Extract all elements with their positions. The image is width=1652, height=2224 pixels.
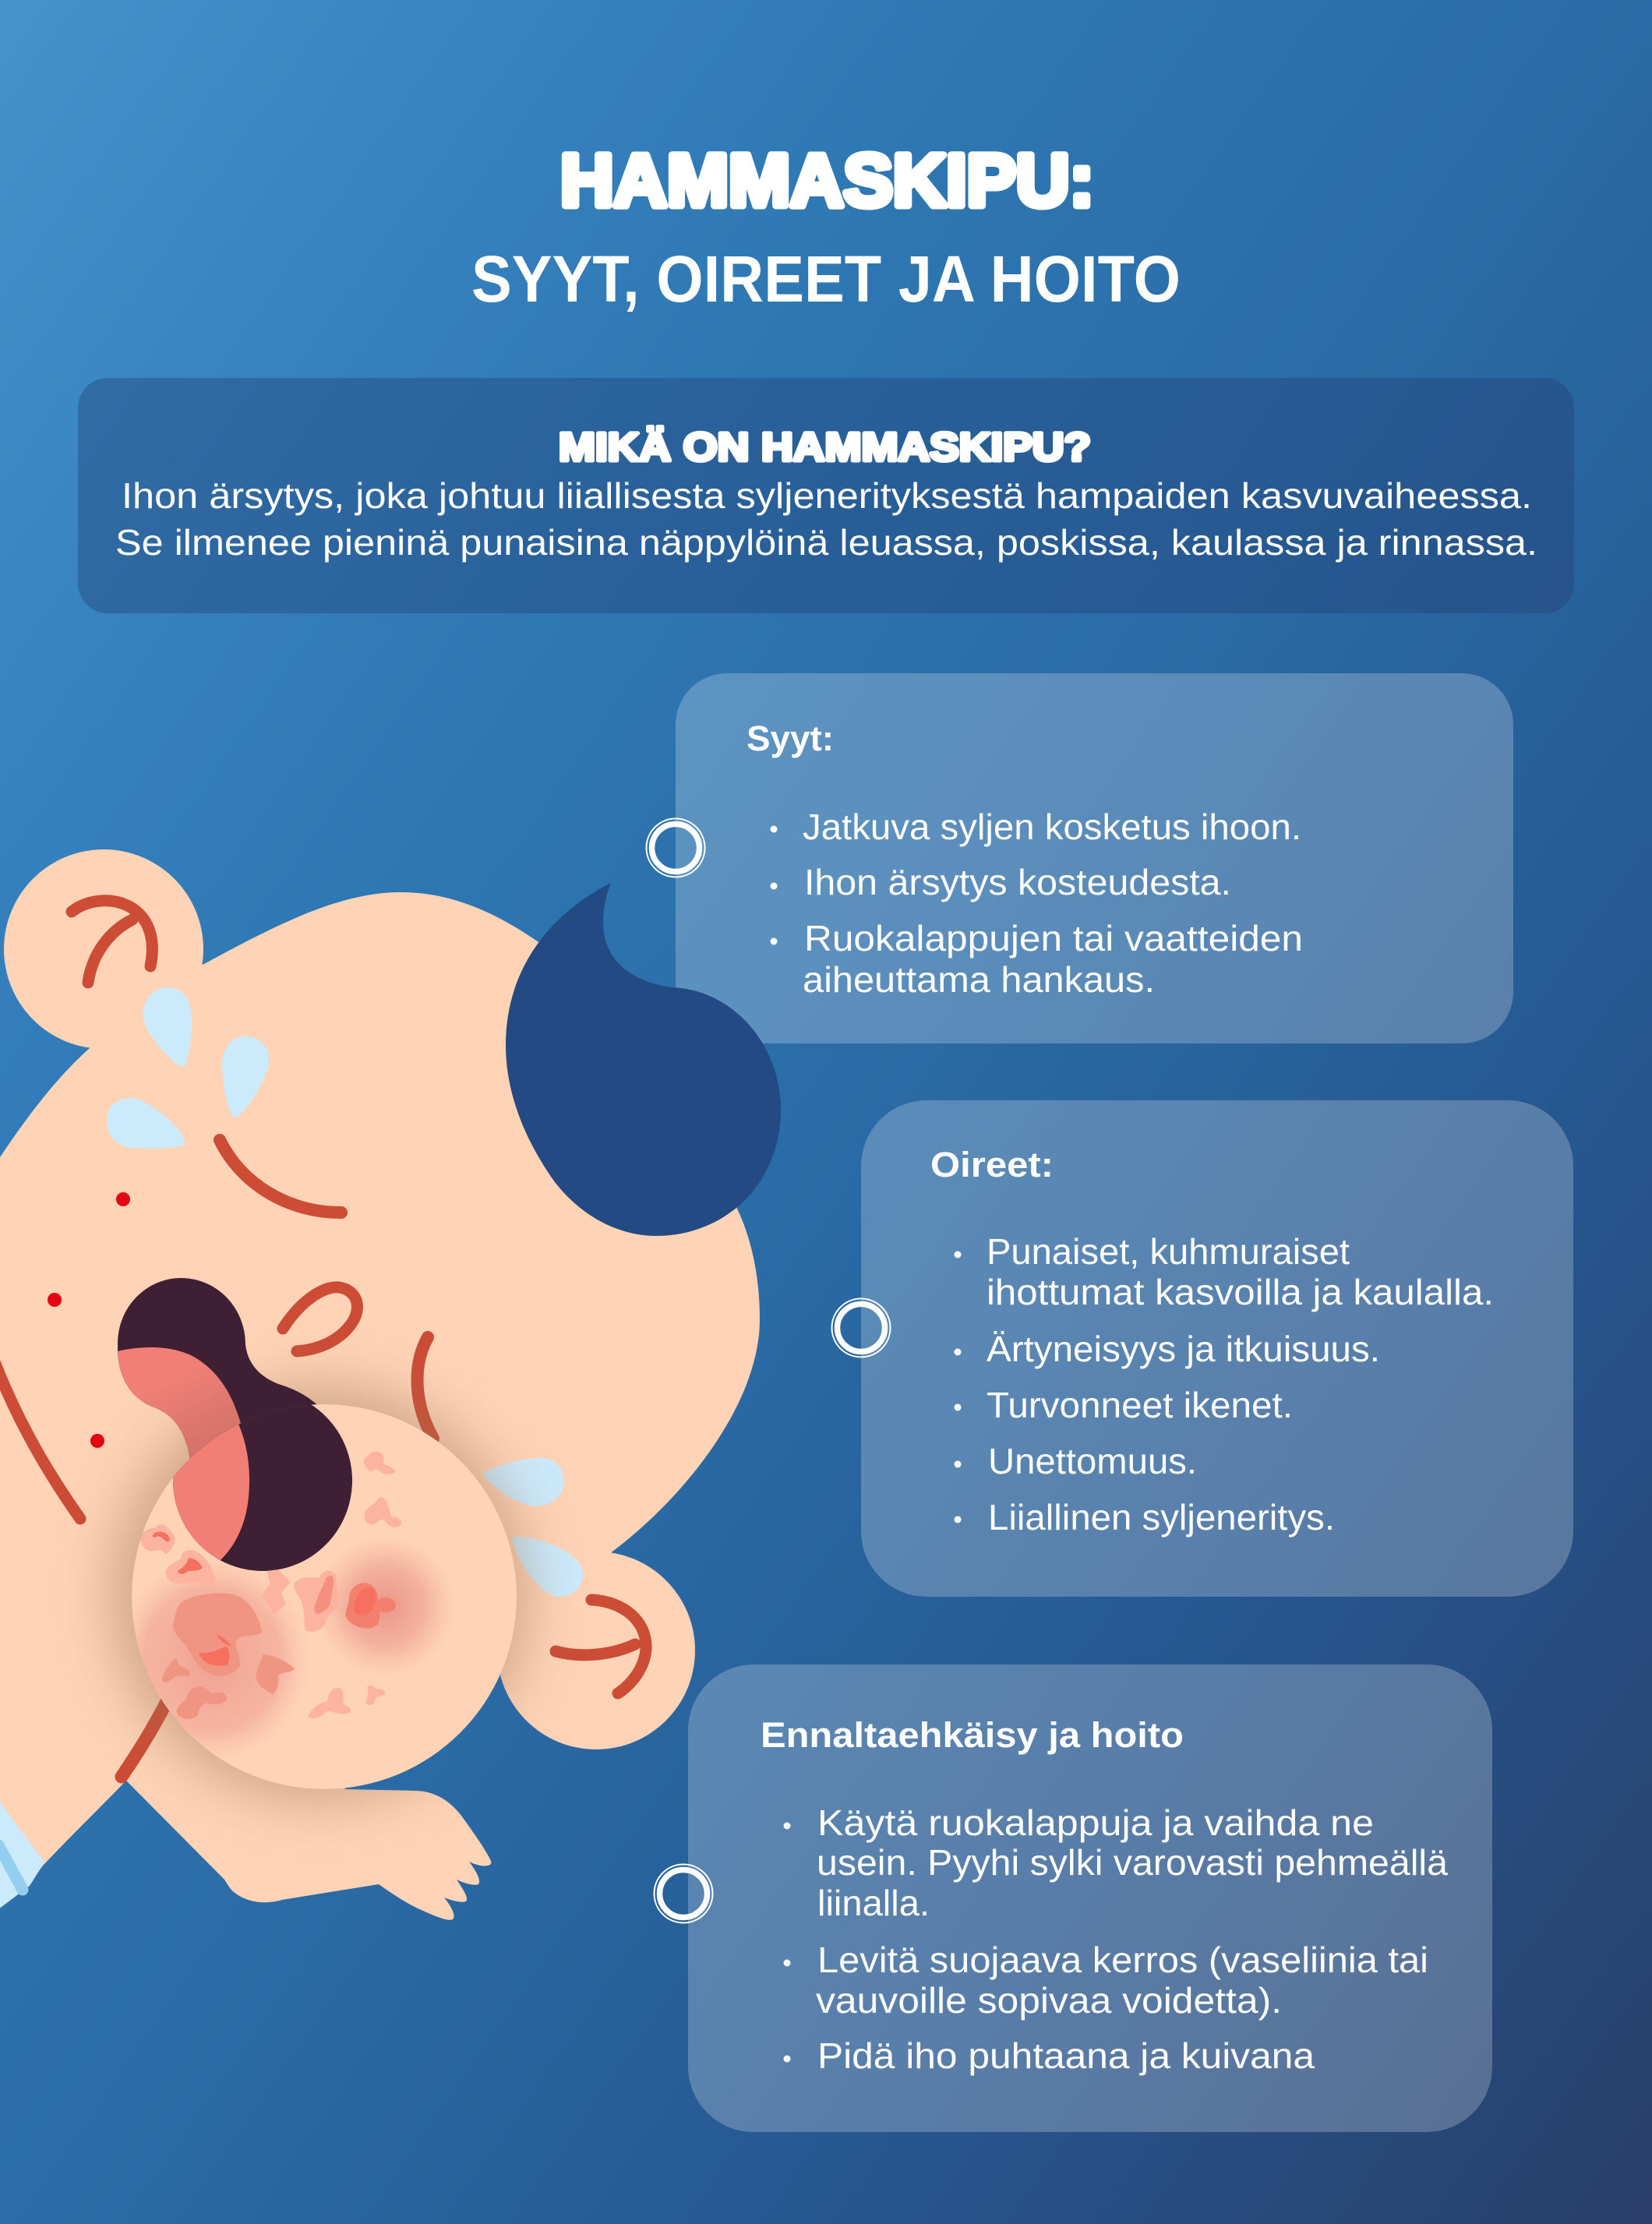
- marker ring: prevention: [655, 1864, 712, 1923]
- icon: hair curl: [506, 883, 781, 1236]
- subtitle: SYYT, OIREET JA HOITO: [471, 242, 1181, 316]
- symptoms list: [954, 1231, 1494, 1537]
- symptoms list: Unettomuus.: [988, 1441, 1197, 1481]
- rash redness: [134, 1545, 446, 1750]
- baby illustration: [0, 849, 781, 1920]
- symptoms list: Turvonneet ikenet.: [987, 1385, 1293, 1425]
- panel: prevention and treatment: [688, 1664, 1492, 2132]
- main heading: HAMMASKIPU:: [560, 139, 1094, 222]
- panel: causes: [676, 673, 1513, 1043]
- prevention list: vauvoille sopivaa voidetta).: [816, 1980, 1282, 2021]
- symptoms heading: Oireet:: [930, 1145, 1054, 1184]
- panel description: Se ilmenee pieninä punaisina näppylöinä leuassa, poskissa, kaulassa ja rinnassa.: [115, 522, 1537, 563]
- prevention list: usein. Pyyhi sylki varovasti pehmeällä: [817, 1842, 1448, 1883]
- prevention list: Levitä suojaava kerros (vaseliinia tai: [817, 1940, 1428, 1980]
- prevention list: Pidä iho puhtaana ja kuivana: [817, 2035, 1315, 2076]
- symptoms list: ihottumat kasvoilla ja kaulalla.: [987, 1272, 1494, 1312]
- prevention list: [784, 1802, 1448, 2076]
- panel: what is teething pain: [78, 378, 1574, 613]
- symptoms list: Ärtyneisyys ja itkuisuus.: [987, 1329, 1380, 1369]
- causes list: Ruokalappujen tai vaatteiden: [804, 918, 1303, 958]
- causes list: Ihon ärsytys kosteudesta.: [804, 862, 1231, 902]
- title: [471, 139, 1181, 316]
- rash blotches: [140, 1451, 401, 1719]
- symptoms list: Liiallinen syljeneritys.: [988, 1497, 1335, 1537]
- magnified mouth: [173, 1404, 352, 1571]
- red spots: [48, 1192, 130, 1448]
- baby head and body: [0, 849, 760, 1920]
- symptoms list: Punaiset, kuhmuraiset: [987, 1231, 1350, 1272]
- sleeve: [0, 1800, 44, 1909]
- marker ring: symptoms: [832, 1298, 890, 1357]
- panel heading: MIKÄ ON HAMMASKIPU?: [559, 425, 1091, 469]
- causes heading: Syyt:: [747, 718, 834, 758]
- tear drops: [107, 987, 583, 1597]
- prevention heading: Ennaltaehkäisy ja hoito: [761, 1715, 1184, 1755]
- prevention list: liinalla.: [817, 1883, 930, 1923]
- panel description: [115, 475, 1537, 563]
- lens shadow: [115, 1389, 524, 1798]
- causes list: [770, 807, 1303, 1000]
- causes list: aiheuttama hankaus.: [803, 959, 1155, 1000]
- causes list: Jatkuva syljen kosketus ihoon.: [803, 807, 1301, 847]
- panel: symptoms: [861, 1100, 1573, 1597]
- face lines: [0, 901, 646, 1777]
- marker ring: causes: [647, 818, 704, 877]
- prevention list: Käytä ruokalappuja ja vaihda ne: [817, 1802, 1374, 1843]
- panel description: Ihon ärsytys, joka johtuu liiallisesta syljenerityksestä hampaiden kasvuvaiheessa.: [122, 475, 1532, 516]
- magnified skin circle: [114, 1387, 517, 1789]
- open mouth on face: [118, 1278, 352, 1481]
